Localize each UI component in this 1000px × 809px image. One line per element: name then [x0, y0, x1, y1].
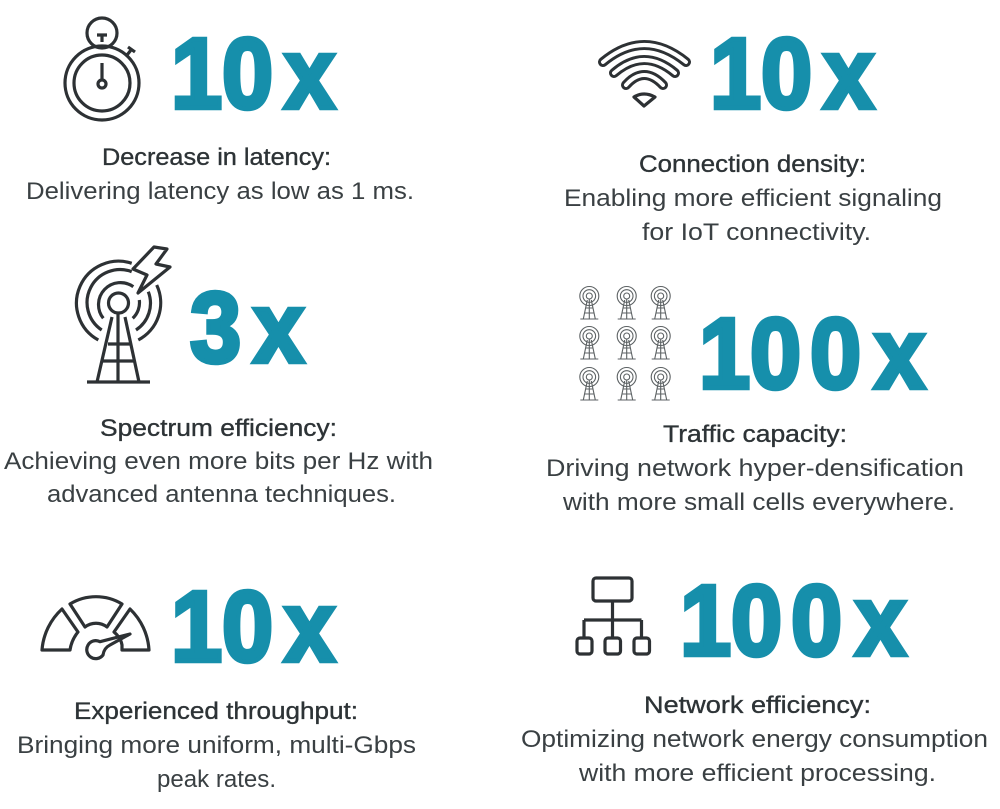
text: network description: Optimizing network energy consumption: [521, 726, 988, 753]
panel: experienced throughput: [17, 571, 416, 793]
text: connection description: Enabling more efficient signaling: [564, 185, 942, 212]
text: traffic description: Driving network hyper-densification: [546, 455, 964, 482]
icon: grid of small towers: [580, 286, 670, 400]
panel: network efficiency: [521, 565, 988, 787]
panel: traffic capacity: with more small cells everywhere.: [562, 489, 955, 516]
stat: 3x: 3x: [190, 272, 304, 384]
heading: connection density: Connection density:: [639, 151, 866, 178]
text: throughput description: Bringing more uniform, multi-Gbps: [17, 732, 416, 759]
icon: wifi: [603, 45, 686, 106]
panel: spectrum efficiency: advanced antenna techniques.: [47, 481, 396, 508]
icon: speedometer gauge: [42, 597, 149, 659]
heading: network efficiency: Network efficiency:: [644, 692, 871, 719]
stat: 10x: 10x: [171, 571, 335, 683]
panel: spectrum efficiency: [4, 247, 433, 508]
panel: traffic capacity: [546, 286, 964, 516]
icon: stopwatch: [65, 18, 139, 120]
heading: traffic capacity: Traffic capacity:: [663, 421, 847, 448]
panel: experienced throughput: peak rates.: [157, 766, 276, 793]
stat: 100x: 100x: [699, 298, 925, 410]
heading: decrease in latency: Decrease in latency:: [102, 144, 331, 171]
stat: 10x: 10x: [171, 18, 335, 130]
icon: antenna tower with lightning: [76, 247, 170, 382]
panel: connection density: [564, 18, 942, 246]
panel: connection density: for IoT connectivity.: [642, 219, 871, 246]
heading: spectrum efficiency: Spectrum efficiency:: [100, 415, 337, 442]
text: latency description: Delivering latency as low as 1 ms.: [26, 178, 414, 205]
text: spectrum description: Achieving even more bits per Hz with: [4, 448, 433, 475]
icon: network hierarchy: [577, 578, 650, 654]
heading: experienced throughput: Experienced throughput:: [74, 698, 358, 725]
stat: 10x: 10x: [710, 18, 874, 130]
stat: 100x: 100x: [680, 565, 906, 677]
panel: decrease in latency: [26, 18, 414, 205]
panel: network efficiency: with more efficient processing.: [578, 760, 936, 787]
